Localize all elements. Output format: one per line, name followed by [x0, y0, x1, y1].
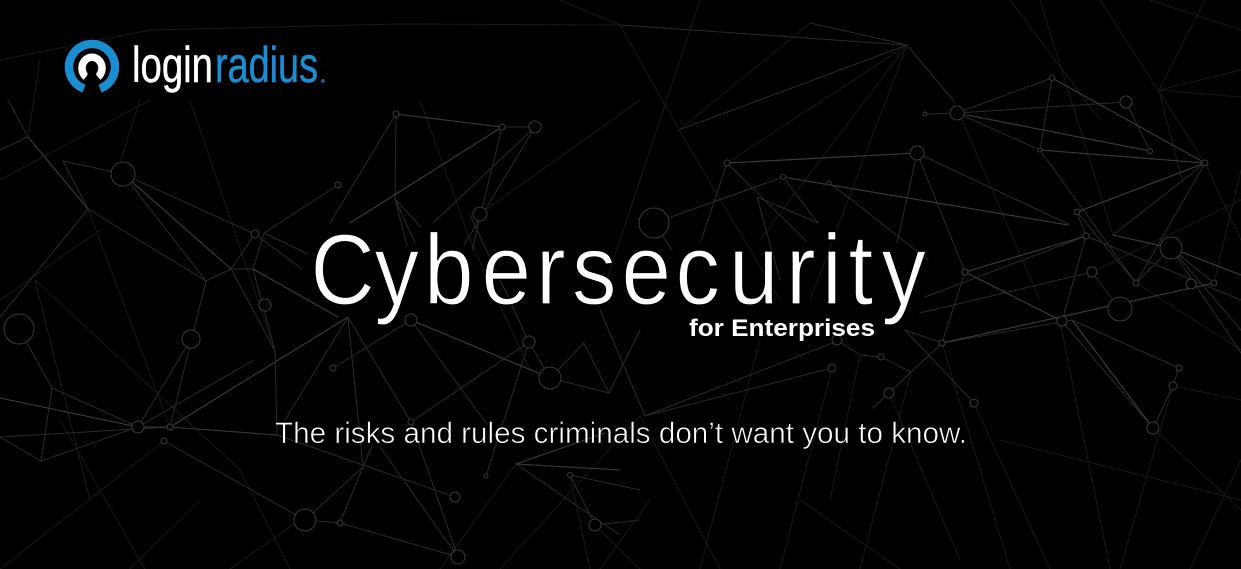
- logo wordmark: login: [132, 37, 213, 93]
- logo wordmark: radius: [215, 37, 318, 93]
- logo: LoginRadius: [69, 37, 325, 93]
- subtitle: for Enterprises: [689, 315, 875, 342]
- logo wordmark: [132, 37, 325, 93]
- tagline: The risks and rules criminals don’t want you to know.: [275, 417, 967, 450]
- logo icon: keyhole ring: [69, 44, 115, 92]
- title: Cybersecurity: [311, 214, 927, 326]
